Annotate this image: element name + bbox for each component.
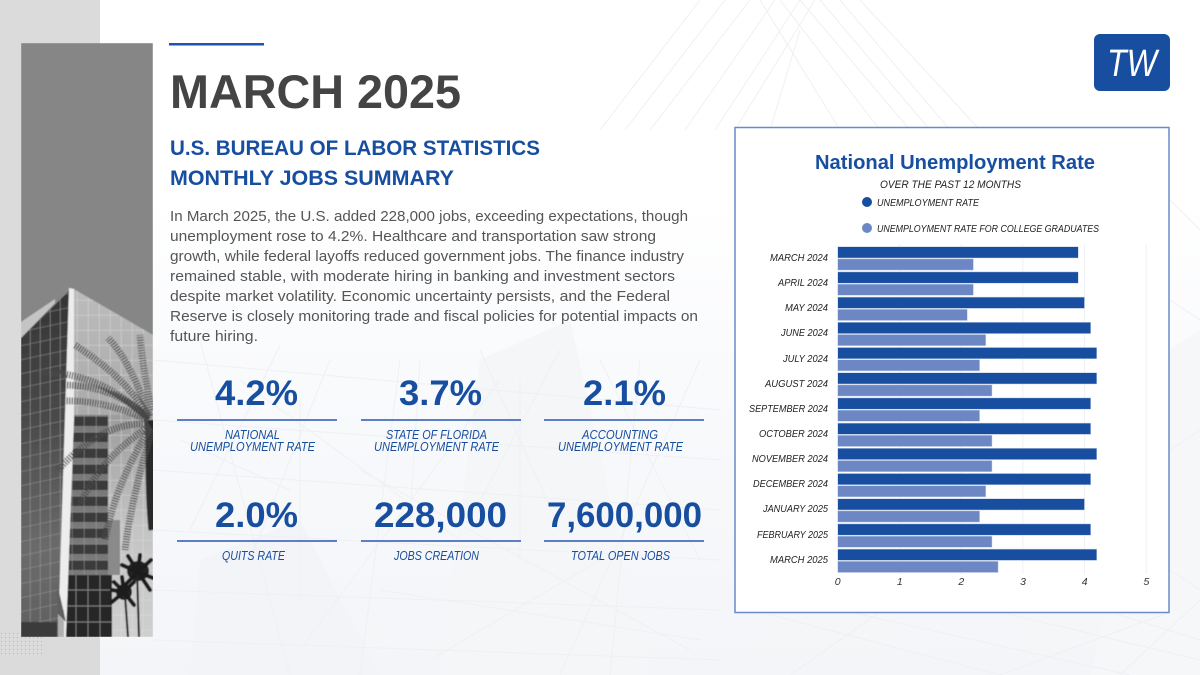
y-axis month labels: AUGUST 2024 (764, 378, 828, 390)
body paragraph: unemployment rose to 4.2%. Healthcare and transportation saw strong (170, 229, 656, 245)
stat: total open jobs (544, 496, 704, 563)
y-axis month labels: JUNE 2024 (780, 327, 828, 339)
x-axis tick labels (835, 576, 1149, 588)
body paragraph: growth, while federal layoffs reduced government jobs. The finance industry (170, 249, 685, 265)
y-axis month labels: JULY 2024 (782, 353, 828, 365)
accent rule above title (169, 43, 264, 46)
body paragraph: In March 2025, the U.S. added 228,000 jobs, exceeding expectations, though (170, 209, 688, 225)
stat: jobs creation: 228,000 (374, 496, 507, 535)
panel: national unemployment rate chart (735, 128, 1169, 612)
y-axis month labels: NOVEMBER 2024 (752, 453, 828, 465)
stat: jobs creation: JOBS CREATION (393, 549, 480, 563)
stat: quits rate (177, 496, 337, 563)
chart subtitle: OVER THE PAST 12 MONTHS (880, 179, 1022, 191)
stat: accounting unemployment rate: UNEMPLOYMENT RATE (558, 440, 684, 454)
stat: national unemployment rate: UNEMPLOYMENT RATE (190, 440, 316, 454)
stat: accounting unemployment rate: ACCOUNTING (581, 428, 658, 442)
y-axis month labels: APRIL 2024 (777, 277, 828, 289)
y-axis month labels (749, 252, 828, 566)
stat: jobs creation (361, 496, 521, 563)
stat: total open jobs: TOTAL OPEN JOBS (571, 549, 671, 563)
legend: UNEMPLOYMENT RATE (877, 197, 980, 209)
y-axis month labels: JANUARY 2025 (762, 503, 828, 515)
left grey strip (0, 0, 100, 675)
subtitle: U.S. BUREAU OF LABOR STATISTICS (170, 136, 540, 160)
stat: national unemployment rate (177, 374, 337, 454)
y-axis month labels: MAY 2024 (785, 302, 828, 314)
stat: total open jobs: 7,600,000 (547, 496, 702, 535)
subtitle (170, 136, 540, 190)
body paragraph (170, 209, 698, 345)
x-axis tick labels: 0 (835, 576, 841, 588)
subtitle: MONTHLY JOBS SUMMARY (170, 166, 454, 190)
body paragraph: Reserve is closely monitoring trade and fiscal policies for potential impacts on (170, 309, 698, 325)
y-axis month labels: DECEMBER 2024 (753, 478, 828, 490)
stat: state of Florida unemployment rate: 3.7% (399, 374, 482, 413)
y-axis month labels: OCTOBER 2024 (759, 428, 828, 440)
y-axis month labels: FEBRUARY 2025 (757, 529, 828, 541)
x-axis tick labels: 3 (1020, 576, 1026, 588)
bar chart: monthly rates (838, 247, 1097, 572)
x-axis tick labels: 5 (1143, 576, 1149, 588)
stat: national unemployment rate: NATIONAL (225, 428, 280, 442)
body paragraph: future hiring. (170, 329, 258, 345)
legend: UNEMPLOYMENT RATE FOR COLLEGE GRADUATES (877, 223, 1099, 235)
stat: accounting unemployment rate: 2.1% (583, 374, 666, 413)
title: MARCH 2025 (170, 65, 461, 118)
stat: national unemployment rate: 4.2% (215, 374, 298, 413)
stat: state of Florida unemployment rate (361, 374, 521, 454)
photo: office tower and palm trees (21, 43, 153, 637)
logo: TW (1094, 34, 1170, 91)
decorative dot grid (0, 630, 43, 655)
y-axis month labels: SEPTEMBER 2024 (749, 403, 828, 415)
stat: state of Florida unemployment rate: STATE OF FLORIDA (386, 428, 487, 442)
body paragraph: despite market volatility. Economic uncertainty persists, and the Federal (170, 289, 670, 305)
x-axis tick labels: 1 (897, 576, 903, 588)
y-axis month labels: MARCH 2024 (770, 252, 828, 264)
x-axis tick labels: 2 (957, 576, 964, 588)
y-axis month labels: MARCH 2025 (770, 554, 828, 566)
legend (862, 197, 1099, 235)
x-axis tick labels: 4 (1082, 576, 1088, 588)
stat: quits rate: QUITS RATE (222, 549, 286, 563)
stat: quits rate: 2.0% (215, 496, 298, 535)
body paragraph: remained stable, with moderate hiring in banking and investment sectors (170, 269, 675, 285)
stat: state of Florida unemployment rate: UNEMPLOYMENT RATE (374, 440, 500, 454)
stat: accounting unemployment rate (544, 374, 704, 454)
chart title: National Unemployment Rate (815, 152, 1095, 174)
logo: TW: TW (1107, 43, 1160, 85)
